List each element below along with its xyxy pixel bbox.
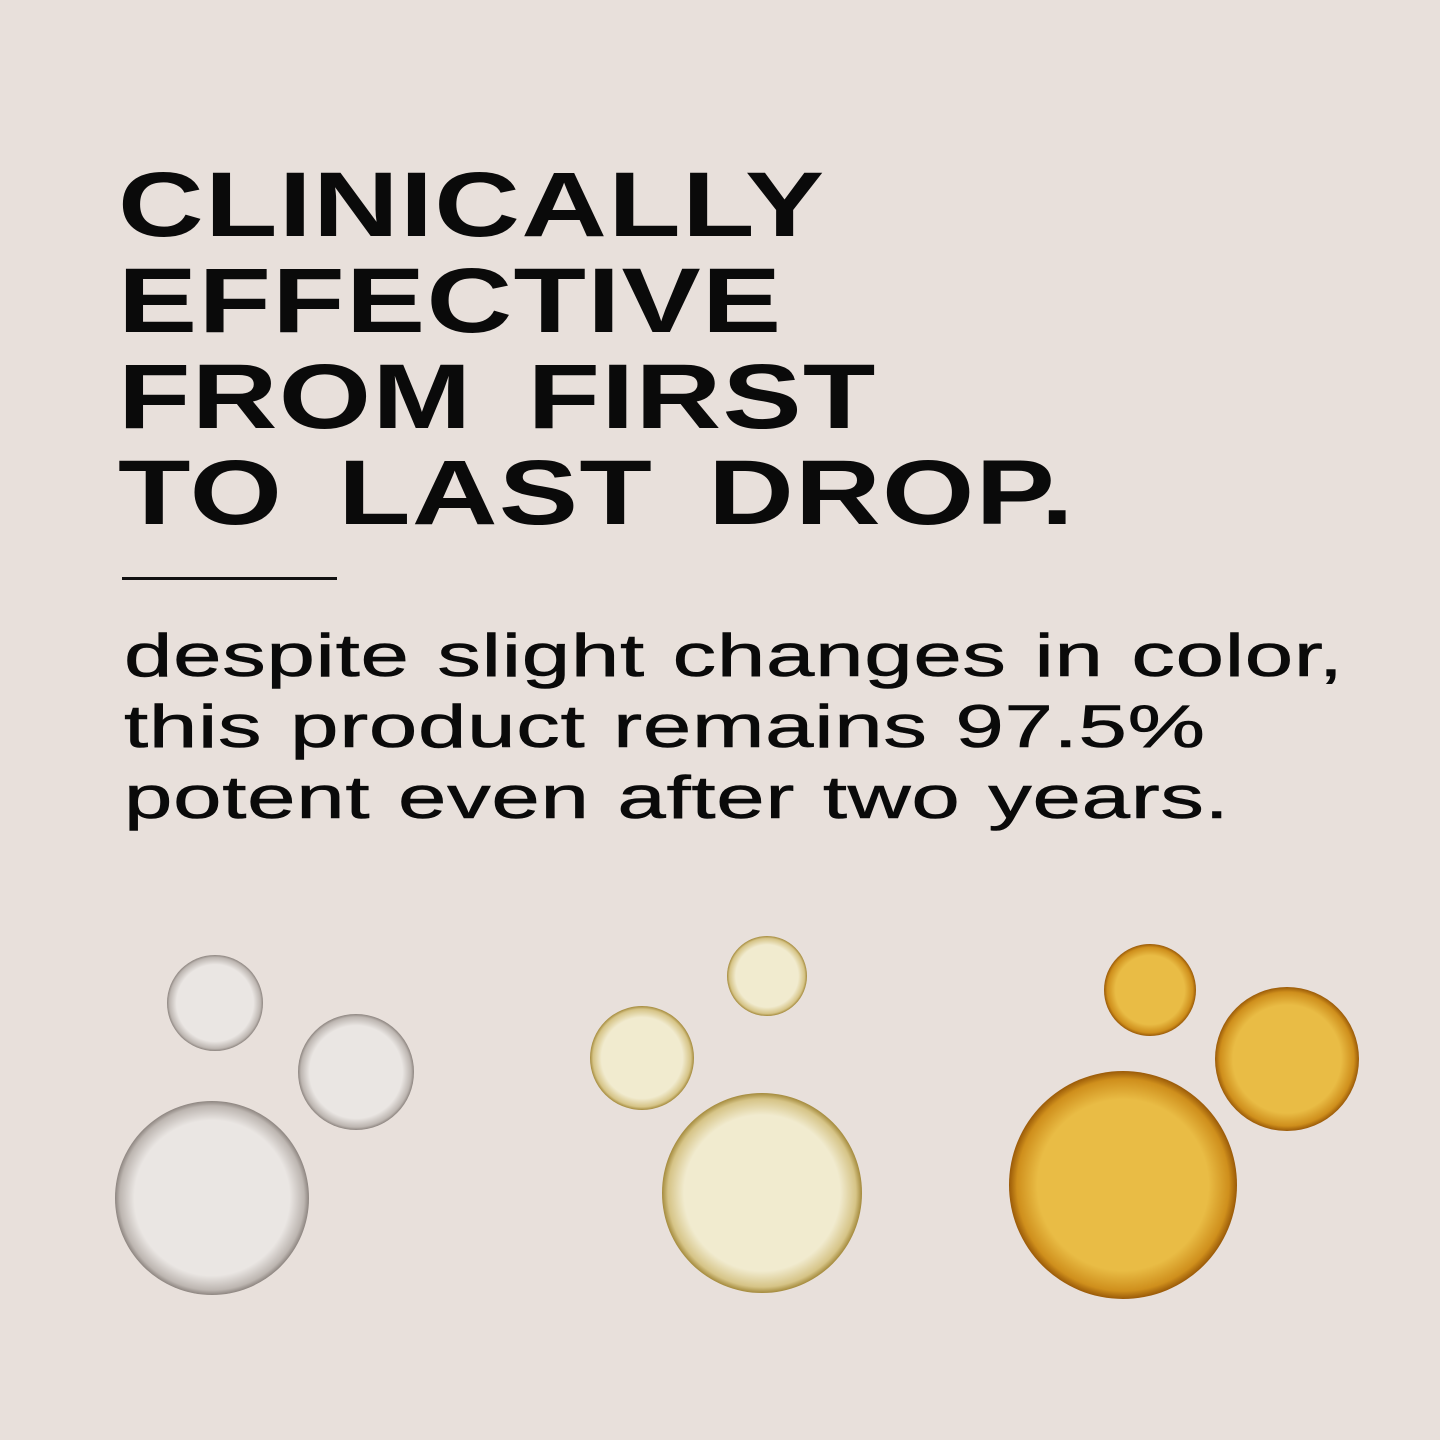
title: CLINICALLY xyxy=(118,154,825,256)
body text: potent even after two years. xyxy=(124,764,1230,831)
title: EFFECTIVE xyxy=(118,250,782,352)
group: clear drops xyxy=(115,955,414,1295)
group: amber drops xyxy=(1009,944,1359,1299)
title: FROM FIRST xyxy=(118,346,877,448)
body text: this product remains 97.5% xyxy=(124,693,1206,760)
group: pale yellow drops xyxy=(590,936,862,1293)
title: TO LAST DROP. xyxy=(118,442,1075,544)
body text: despite slight changes in color, xyxy=(124,622,1344,689)
body text xyxy=(124,622,1344,831)
title xyxy=(118,154,1075,544)
